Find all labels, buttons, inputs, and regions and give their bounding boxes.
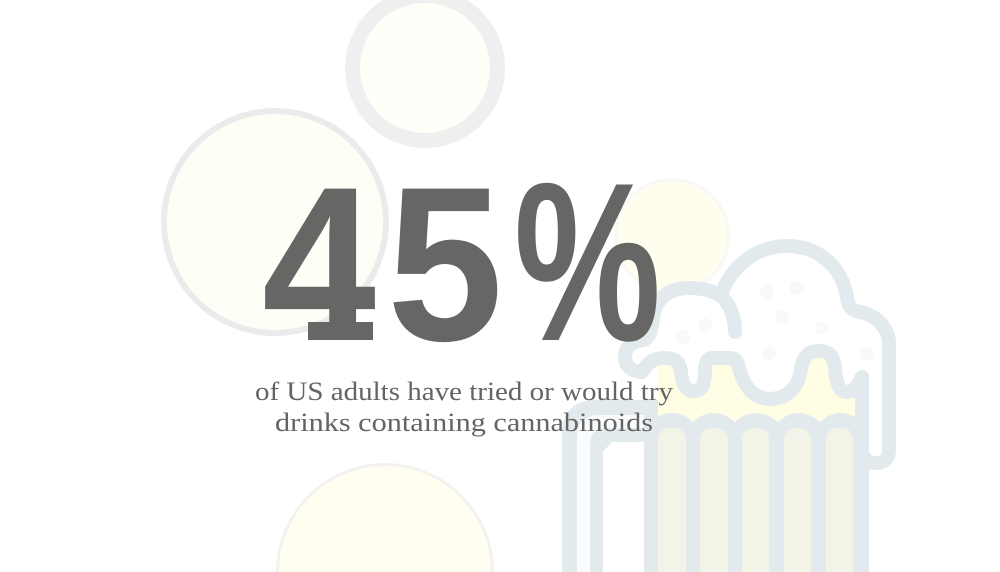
- foam bubbles: [676, 281, 874, 361]
- line 2: drinks containing cannabinoids: [275, 408, 653, 437]
- big number: 45%: [262, 135, 661, 388]
- glass columns: [658, 428, 853, 572]
- big number: 45%: 4: [262, 141, 376, 387]
- big number: 45%: %: [514, 135, 661, 388]
- foam interior: [630, 246, 889, 450]
- bubble: left large: [164, 111, 386, 333]
- mug body and glass ridges: [644, 400, 869, 572]
- bubble: bottom: [278, 465, 492, 572]
- line 1: of US adults have tried or would try: [255, 377, 673, 406]
- beer fill: [658, 351, 855, 420]
- foam outline: [625, 246, 889, 463]
- big number: 45%: 5: [387, 141, 503, 387]
- bubble: top: [352, 0, 498, 140]
- description text: [255, 377, 673, 437]
- mug handle: [562, 400, 658, 572]
- icon: beer mug: [562, 246, 889, 572]
- bubble: right small: [616, 180, 728, 292]
